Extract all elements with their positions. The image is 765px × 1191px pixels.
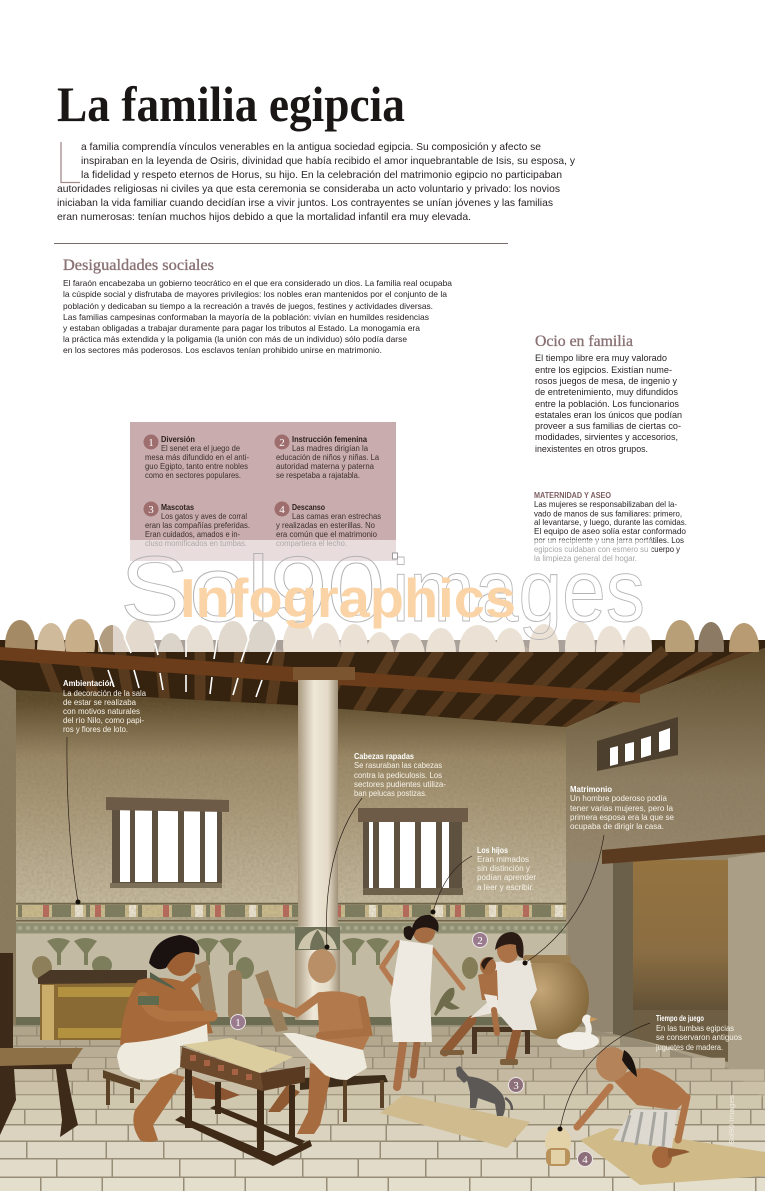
figure: old man playing senet right <box>268 949 371 1134</box>
figure: goose <box>557 1014 599 1050</box>
item 3 mascotas: Los gatos y aves de corral <box>161 512 247 521</box>
callout: ambientacion: con motivos naturales <box>63 707 140 716</box>
intro text block: la fidelidad y respeto eternos de Horus, su hijo. En la celebración del matrimonio egipcio no participaban <box>81 169 562 181</box>
floor <box>0 1025 765 1191</box>
item 1 diversion: 1 <box>148 437 154 449</box>
panel: ocio en familia: inexistentes en otros grupos. <box>535 444 648 454</box>
toy on floor <box>545 1127 571 1166</box>
jar <box>515 955 589 1039</box>
panel: ocio en familia: proveer a sus familias de ciertas co- <box>535 421 681 431</box>
main beam <box>0 647 640 703</box>
callout: ambientacion: Ambientación <box>63 679 114 688</box>
item 4 descanso: compartiera el lecho. <box>276 539 347 548</box>
panel: desigualdades sociales <box>63 257 452 355</box>
panel: desigualdades sociales: y estaban obligadas a trabajar duramente para pagar los tributos al Estado. La monogamia era <box>63 323 420 333</box>
callout: tiempo de juego: juguetes de madera. <box>655 1043 723 1052</box>
illustration: egyptian house interior <box>0 619 765 1191</box>
watermark overlay band <box>113 540 652 652</box>
high window right <box>597 717 678 771</box>
numbered marker 2: 2 <box>477 935 483 947</box>
item 2 instruccion femenina: 2 <box>279 437 285 449</box>
drop cap L <box>61 142 80 182</box>
panel: maternidad y aseo: egipcios cuidaban con esmero su cuerpo y <box>534 545 680 554</box>
item 4 descanso: y realizadas en esterillas. No <box>276 521 376 530</box>
numbered marker 4 <box>578 1152 592 1166</box>
window centre <box>358 808 468 895</box>
item 3 mascotas <box>144 502 250 548</box>
callout: tiempo de juego: se conservaron antiguos <box>656 1033 742 1042</box>
item 4 descanso: 4 <box>279 504 285 516</box>
panel: ocio en familia: entre la población. Los funcionarios <box>535 399 680 409</box>
item 2 instruccion femenina: autoridad materna y paterna <box>276 462 375 471</box>
numbered marker 3: 3 <box>513 1080 519 1092</box>
ceiling <box>0 640 765 727</box>
panel: maternidad y aseo: la limpieza general del hogar. <box>534 554 637 563</box>
panel: maternidad y aseo: Las mujeres se responsabilizaban del la- <box>534 500 677 509</box>
intro text block: inspiraban en la leyenda de Osiris, divinidad que había recibido el amor inquebrantable de Isis, su esposa, y <box>81 155 576 167</box>
intro text block: autoridades religiosas ni civiles ya que esta ceremonia se consideraba un acto voluntario y privado: los novios <box>57 183 560 195</box>
lotus wall decoration <box>32 938 478 1016</box>
callout: cabezas rapadas <box>324 752 446 950</box>
heading: desigualdades sociales: Desigualdades sociales <box>63 257 214 274</box>
figure: seated woman with child <box>440 932 537 1065</box>
item 2 instruccion femenina <box>274 434 380 480</box>
callout: ambientacion: de estar se realizaba <box>63 698 137 707</box>
panel: maternidad y aseo: El equipo de aseo solía estar conformado <box>534 527 687 536</box>
panel: legend of numbered items <box>130 422 396 561</box>
item 1 diversion <box>144 434 249 480</box>
left wall <box>0 670 16 1030</box>
right wall <box>566 648 765 1100</box>
watermark: sol90 images <box>120 537 645 641</box>
watermark small square <box>392 553 398 559</box>
callout: ambientacion: La decoración de la sala <box>63 689 147 698</box>
panel: ocio en familia: estatales eran los únicos que podían <box>535 410 682 420</box>
panel: ocio en familia: modidades, sirvientes y accesorios, <box>535 432 678 442</box>
senet game table <box>175 1038 312 1166</box>
stools <box>103 1070 388 1122</box>
callout: cabezas rapadas: Se rasuraban las cabezas <box>354 761 442 770</box>
heading: maternidad y aseo: MATERNIDAD Y ASEO <box>534 491 611 500</box>
panel: maternidad y aseo: al levantarse, y luego, durante las comidas. <box>534 518 687 527</box>
figure: cat <box>456 1066 512 1116</box>
door interior <box>633 860 728 1015</box>
intro text block <box>57 141 576 223</box>
item 2 instruccion femenina: Instrucción femenina <box>292 435 368 444</box>
callout: matrimonio: tener varias mujeres, pero la <box>570 804 674 813</box>
callout: tiempo de juego: En las tumbas egipcias <box>656 1024 734 1033</box>
item 1 diversion: Diversión <box>161 435 195 444</box>
log ends <box>5 619 759 652</box>
item 4 descanso: Descanso <box>292 503 325 512</box>
panel: desigualdades sociales: población y dedicaban su tiempo a la recreación a través de juegos, festines y actividades diversas. <box>63 301 433 311</box>
item 2 instruccion femenina: educación de niños y niñas. La <box>276 453 380 462</box>
back wall <box>0 680 600 1030</box>
callout: cabezas rapadas: contra la pediculosis. Los <box>354 771 442 780</box>
wall beside door <box>728 852 765 1100</box>
intro text block: a familia comprendía vínculos venerables en la antigua sociedad egipcia. Su composición y afecto se <box>81 141 541 153</box>
callout: los hijos <box>430 846 536 914</box>
callout: matrimonio: Un hombre poderoso podía <box>570 794 668 803</box>
figure: girl in white dress <box>382 915 463 1087</box>
item 2 instruccion femenina: Las madres dirigían la <box>292 444 369 453</box>
callout: matrimonio: ocupaba de dirigir la casa. <box>570 822 664 831</box>
item 3 mascotas: cluso momificados en tumbas. <box>145 539 247 548</box>
panel: desigualdades sociales: Las familias campesinas conformaban la mayoría de la población: vivían en humildes residencias <box>63 312 429 322</box>
lower wall below frieze <box>16 933 568 1025</box>
watermark: infographics: Infographics <box>180 567 516 629</box>
chest <box>38 970 147 1040</box>
numbered marker 2 <box>472 932 488 948</box>
numbered marker 1: 1 <box>235 1017 241 1029</box>
panel: desigualdades sociales: El faraón encabezaba un gobierno teocrático en el que era considerado un dios. La familia real ocupaba <box>63 278 452 288</box>
frieze band <box>16 902 568 934</box>
heading: ocio en familia: Ocio en familia <box>535 333 633 350</box>
callout: ambientacion: del río Nilo, como papi- <box>63 716 144 725</box>
credit: sol90 images: Sol90 Images <box>729 1094 736 1145</box>
watermark: sol90 images: images <box>392 541 645 640</box>
amphora shapes behind players <box>195 960 288 1032</box>
item 3 mascotas: eran las compañías preferidas. <box>145 521 250 530</box>
item 4 descanso: Las camas eran estrechas <box>292 512 381 521</box>
panel: desigualdades sociales: en los sectores más poderosos. Los esclavos tenían prohibido unirse en matrimonio. <box>63 345 382 355</box>
dado <box>16 1017 568 1026</box>
item 2 instruccion femenina: se respetaba a rajatabla. <box>276 471 360 480</box>
callout: cabezas rapadas: Cabezas rapadas <box>354 752 414 761</box>
item 1 diversion: guo Egipto, tanto entre nobles <box>145 462 248 471</box>
intro text block: eran numerosas: tenían muchos hijos debido a que la mortalidad infantil era muy elevada. <box>57 211 471 223</box>
callout: tiempo de juego: Tiempo de juego <box>656 1014 704 1023</box>
door lintel <box>602 835 765 864</box>
callout: matrimonio: Matrimonio <box>570 785 612 794</box>
callout: los hijos: Los hijos <box>477 846 508 855</box>
callout: cabezas rapadas: ban pelucas postizas. <box>354 789 427 798</box>
intro text block: iniciaban la vida familiar cuando decidían irse a vivir juntos. Los contrayentes se unían jóvenes y las familias <box>57 197 553 209</box>
item 1 diversion: mesa más difundido en el anti- <box>145 453 249 462</box>
panel: ocio en familia: rosos juegos de mesa, de ingenio y <box>535 376 677 386</box>
figure: man playing senet left <box>117 935 240 1142</box>
panel: ocio en familia: entre los egipcios. Existían nume- <box>535 365 672 375</box>
callout: los hijos: podían aprender <box>477 873 536 882</box>
panel: ocio en familia: de entretenimiento, muy difundidos <box>535 387 679 397</box>
numbered marker 1 <box>230 1014 246 1030</box>
watermark: sol90 images: Sol90 <box>120 537 385 641</box>
title: La familia egipcia <box>57 76 405 132</box>
callout: ambientacion <box>63 679 147 904</box>
callout: matrimonio: primera esposa era la que se <box>570 813 675 822</box>
panel: maternidad y aseo <box>534 491 687 563</box>
door shade pillar <box>613 862 633 1038</box>
wall texture <box>0 680 765 920</box>
callout: los hijos: Eran mimados <box>477 855 529 864</box>
item 4 descanso: era común que el matrimonio <box>276 530 378 539</box>
callout: los hijos: a leer y escribir. <box>477 883 534 892</box>
numbered marker 3 <box>508 1078 524 1092</box>
numbered marker 4: 4 <box>582 1154 588 1166</box>
callout: matrimonio <box>522 785 675 966</box>
callout: los hijos: sin distinción y <box>477 864 530 873</box>
panel: ocio en familia <box>535 333 682 454</box>
chair left <box>0 953 83 1137</box>
panel: desigualdades sociales: la práctica más extendida y la poligamia (la unión con más de un individuo) sólo podía darse <box>63 334 407 344</box>
callout: ambientacion: ros y flores de loto. <box>63 725 128 734</box>
windows left and centre <box>106 797 229 888</box>
item 3 mascotas: Mascotas <box>161 503 194 512</box>
item 1 diversion: El senet era el juego de <box>161 444 241 453</box>
panel: maternidad y aseo: vado de manos de sus familiares: primero, <box>534 510 682 518</box>
mats <box>380 1095 765 1185</box>
callout: cabezas rapadas: sectores pudientes utiliza- <box>354 780 446 789</box>
item 3 mascotas: 3 <box>148 504 154 516</box>
column <box>295 680 340 1020</box>
panel: desigualdades sociales: la cúspide social y disfrutaba de mayores privilegios: los nobles eran mantenidos por el conjunto de la <box>63 289 447 299</box>
figure: boy playing <box>577 1047 690 1168</box>
item 3 mascotas: Eran cuidados, amados e in- <box>145 530 240 539</box>
panel: ocio en familia: El tiempo libre era muy valorado <box>535 353 667 363</box>
item 1 diversion: como en sectores populares. <box>145 471 241 480</box>
panel: maternidad y aseo: por un recipiente y una jarra portátiles. Los <box>534 536 684 545</box>
callout: tiempo de juego <box>558 1014 742 1132</box>
watermark rays <box>97 627 282 697</box>
item 4 descanso <box>274 502 381 548</box>
